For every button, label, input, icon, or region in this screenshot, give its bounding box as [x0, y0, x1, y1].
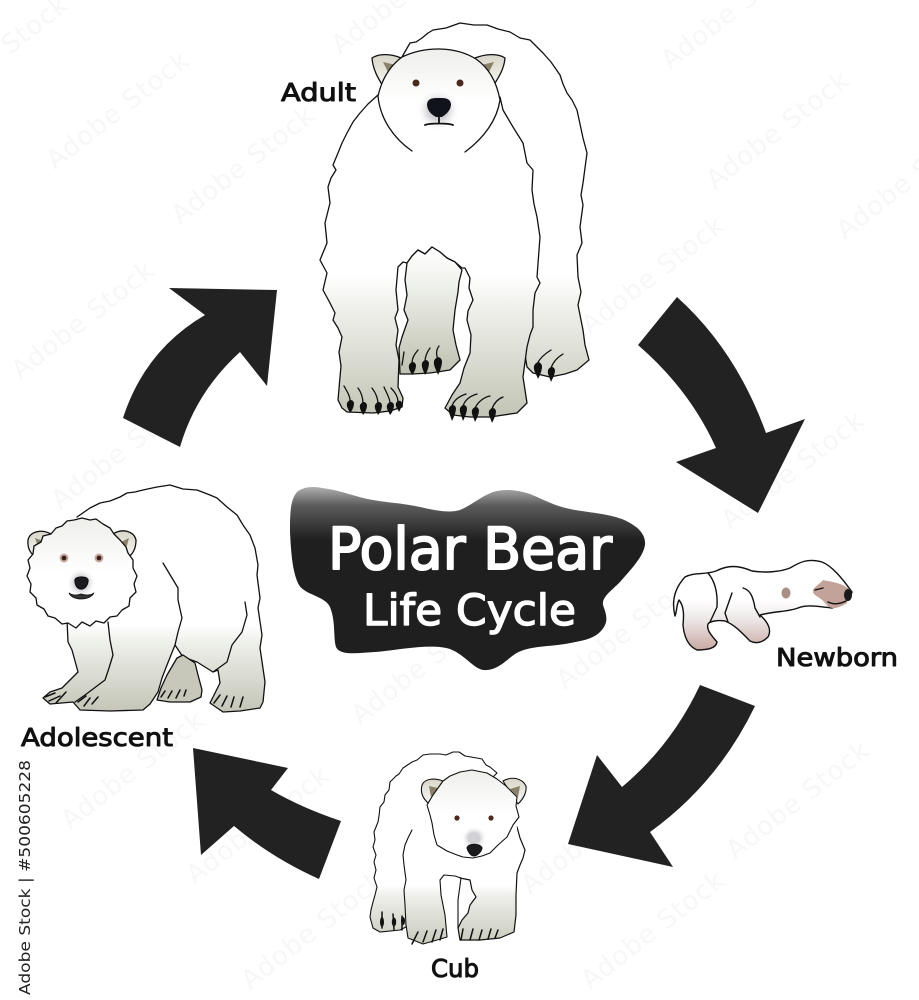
- newborn polar bear cub: [674, 560, 852, 650]
- adult near body and legs: [320, 95, 540, 417]
- cub eyes: [454, 815, 494, 821]
- newborn body: [674, 560, 852, 650]
- watermark: Adobe Stock pattern: Adobe Stock: [516, 770, 671, 901]
- adolescent label: Adolescent: [21, 723, 173, 752]
- adult claw tips: [347, 357, 555, 423]
- cub label: Cub: [431, 954, 479, 983]
- cub far front leg: [458, 827, 525, 940]
- newborn nose: [844, 589, 852, 601]
- cub polar bear: [370, 752, 526, 944]
- adolescent polar bear: [27, 485, 265, 712]
- adult claws: [344, 346, 563, 409]
- cub back body: [370, 752, 497, 932]
- adult inner ears: [383, 62, 494, 74]
- title panel: [290, 487, 645, 670]
- adult eyes: [412, 80, 464, 86]
- watermark: Adobe Stock pattern: Adobe Stock: [6, 255, 161, 386]
- adolescent ears: [28, 531, 136, 558]
- adolescent hip line: [213, 602, 247, 672]
- watermark: Adobe Stock pattern: Adobe Stock: [716, 405, 871, 536]
- newborn label: Newborn: [776, 643, 898, 672]
- cub muzzle: [461, 826, 487, 850]
- adult rear body: [402, 23, 589, 377]
- cub inner ears: [429, 786, 520, 797]
- adult far front leg: [399, 247, 462, 374]
- adolescent far hind leg: [157, 655, 202, 702]
- newborn muzzle patch: [813, 580, 850, 608]
- arrow: newborn to cub: [568, 685, 755, 867]
- adolescent inner ears: [35, 538, 129, 549]
- adolescent leg line: [75, 622, 113, 702]
- vertical stock credit: Adobe Stock | #500605228: [16, 760, 34, 995]
- watermark: Adobe Stock pattern: Adobe Stock: [46, 385, 201, 516]
- adult nose: [427, 98, 451, 117]
- adult mouth: [425, 116, 453, 125]
- adolescent back body and rear leg: [77, 485, 265, 712]
- watermark: Adobe Stock pattern: Adobe Stock: [551, 565, 706, 696]
- adolescent mouth: [69, 593, 94, 599]
- arrow: adult to newborn: [638, 297, 805, 513]
- adult head outline: [378, 49, 500, 152]
- adolescent claws: [45, 690, 243, 707]
- watermark: Adobe Stock pattern: Adobe Stock: [576, 210, 731, 341]
- cub front body outline: [403, 830, 461, 944]
- cub ears: [421, 778, 526, 804]
- title line 2: Life Cycle: [363, 586, 576, 636]
- adult muzzle: [416, 89, 460, 131]
- adult head fill: [378, 49, 500, 152]
- cub near front body: [403, 800, 517, 944]
- adolescent front body and leg: [43, 563, 182, 711]
- cub head: [427, 770, 519, 858]
- watermark: Adobe Stock pattern: Adobe Stock: [721, 735, 876, 866]
- watermark: Adobe Stock pattern: Adobe Stock: [56, 705, 211, 836]
- adolescent eyes: [60, 554, 104, 562]
- title line 1: Polar Bear: [328, 515, 612, 583]
- newborn eye spot: [782, 588, 790, 598]
- cub claws: [382, 912, 498, 944]
- watermark: Adobe Stock pattern: Adobe Stock: [41, 45, 196, 176]
- watermark: Adobe Stock pattern: Adobe Stock: [166, 100, 321, 231]
- watermark: Adobe Stock pattern: Adobe Stock: [701, 65, 856, 196]
- adolescent muzzle: [66, 568, 96, 598]
- arrow: adolescent to adult: [123, 288, 277, 447]
- cub nose: [467, 844, 482, 856]
- newborn closed eye and mouth: [815, 588, 846, 604]
- arrow: cub to adolescent: [193, 748, 341, 879]
- newborn body lines: [708, 573, 760, 622]
- adult ears: [372, 55, 505, 88]
- cub claw tips: [380, 917, 405, 927]
- adolescent head: [27, 518, 137, 628]
- adolescent nose: [75, 577, 88, 589]
- watermark: Adobe Stock pattern: Adobe Stock: [576, 865, 731, 996]
- watermark: Adobe Stock pattern: Adobe Stock: [346, 600, 501, 731]
- adult label: Adult: [281, 78, 356, 107]
- watermark: Adobe Stock pattern: Adobe Stock: [181, 760, 336, 891]
- title blob: [290, 487, 645, 670]
- watermark: Adobe Stock pattern: Adobe Stock: [236, 865, 391, 996]
- adult polar bear: [320, 23, 589, 423]
